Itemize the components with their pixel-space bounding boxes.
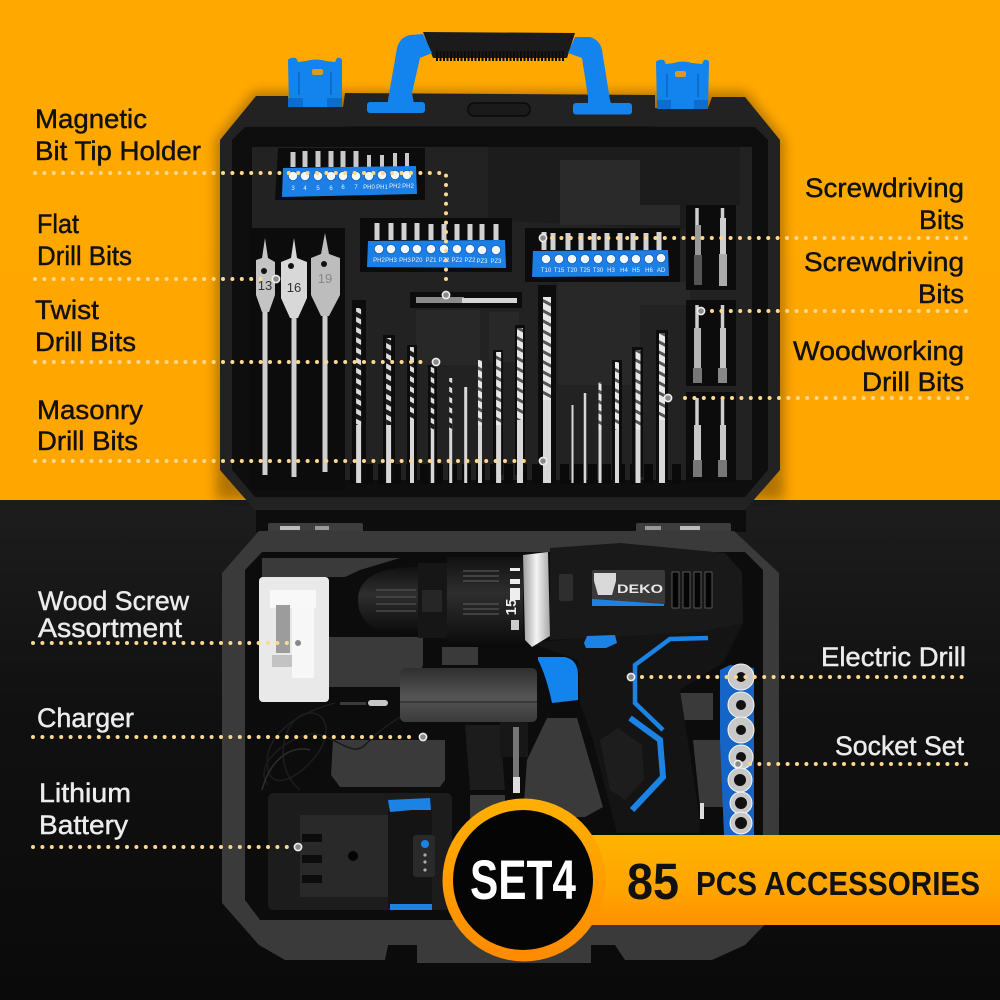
label: Screwdriving Bits 2 bbox=[804, 247, 964, 309]
label: Screwdriving Bits 1: Bits bbox=[919, 205, 964, 235]
label: Masonry Drill Bits: Masonry bbox=[37, 395, 144, 425]
label: Screwdriving Bits 2: Bits bbox=[918, 279, 964, 309]
bit holder strip: torx / hex bbox=[532, 232, 669, 277]
label: Magnetic Bit Tip Holder bbox=[35, 104, 201, 166]
bit holder strip: PH / PZ: PZ3 bbox=[476, 259, 488, 265]
top case: left blue clasp bbox=[288, 58, 342, 107]
flat drill bits: 16 bbox=[287, 280, 301, 295]
bit holder strip: PH / PZ: PZ0 bbox=[411, 258, 423, 264]
bit holder strip: PH / PZ: PZ2 bbox=[464, 258, 476, 264]
drill: motor body bbox=[550, 543, 743, 640]
label: Magnetic Bit Tip Holder: Bit Tip Holder bbox=[35, 136, 201, 166]
drill: grip panel bbox=[600, 728, 644, 800]
top case: right blue clasp bbox=[656, 60, 709, 109]
magnetic bit holder strip: 6 bbox=[341, 185, 345, 191]
label: Woodworking Drill Bits bbox=[793, 336, 964, 397]
label: Flat Drill Bits: Drill Bits bbox=[37, 241, 132, 271]
label: Magnetic Bit Tip Holder: Magnetic bbox=[35, 104, 147, 134]
drill: DEKO badge: DEKO bbox=[617, 582, 663, 596]
bit holder strip: torx / hex: H4 bbox=[620, 268, 628, 274]
label: Lithium Battery bbox=[39, 778, 131, 840]
wood screw assortment box bbox=[259, 577, 329, 702]
bit holder strip: PH / PZ: PZ2 bbox=[451, 258, 463, 264]
magnetic bit tip holder bbox=[416, 297, 517, 303]
handle: right blue arm bbox=[568, 37, 632, 114]
magnetic bit holder strip: 7 bbox=[354, 185, 358, 191]
bit holder strip: torx / hex: AD bbox=[657, 268, 666, 274]
label: Masonry Drill Bits bbox=[37, 395, 144, 456]
electric drill bbox=[358, 543, 743, 833]
label: Woodworking Drill Bits: Drill Bits bbox=[862, 367, 964, 397]
bit holder strip: torx / hex: H3 bbox=[607, 268, 615, 274]
label: Lithium Battery: Lithium bbox=[39, 778, 131, 808]
magnetic bit holder strip: PH0 bbox=[363, 185, 375, 191]
flat drill bits: 13 bbox=[258, 278, 272, 293]
drill: chuck bbox=[358, 567, 418, 635]
banner: SET4 badge: SET4 bbox=[470, 848, 576, 911]
bit holder strip: torx / hex: H5 bbox=[632, 268, 640, 274]
label: Electric Drill: Electric Drill bbox=[821, 642, 966, 672]
drill: DEKO badge bbox=[592, 570, 665, 606]
label: Screwdriving Bits 1 bbox=[805, 173, 964, 235]
bit holder strip: torx / hex: T10 bbox=[541, 268, 552, 274]
charger body and plug bbox=[400, 668, 537, 793]
callout lines: top section bbox=[35, 173, 968, 465]
label: Lithium Battery: Battery bbox=[39, 810, 129, 840]
top case: shell bbox=[220, 93, 780, 510]
socket set bbox=[720, 664, 754, 835]
banner: 85 PCS ACCESSORIES bbox=[627, 853, 980, 910]
flat drill bits bbox=[256, 233, 340, 477]
magnetic bit holder strip: 6 bbox=[329, 186, 333, 192]
bit holder strip: PH / PZ: PZ1 bbox=[425, 258, 437, 264]
bit holder strip: PH / PZ: PH3 bbox=[399, 258, 411, 264]
drill: vents bbox=[672, 572, 712, 608]
magnetic bit holder strip: 3 bbox=[291, 186, 295, 192]
screwdriving bits, right column bbox=[693, 208, 727, 477]
label: Twist Drill Bits: Drill Bits bbox=[35, 327, 136, 357]
bit holder strip: PH / PZ: PZ3 bbox=[490, 259, 502, 265]
bit holder strip: torx / hex: T15 bbox=[554, 268, 565, 274]
label: Socket Set: Socket Set bbox=[835, 731, 964, 761]
drill: ring and clutch: 15 bbox=[503, 599, 520, 615]
bit holder strip: torx / hex: T20 bbox=[567, 268, 578, 274]
bottom case: shell bbox=[222, 531, 779, 963]
handle: left blue arm bbox=[367, 34, 432, 113]
top case: soft shadow bbox=[216, 92, 784, 500]
bit holder strip: PH / PZ: PH3 bbox=[385, 258, 397, 264]
lithium battery bbox=[268, 793, 452, 910]
hinges bbox=[256, 510, 746, 534]
label: Masonry Drill Bits: Drill Bits bbox=[37, 426, 138, 456]
twist and masonry drill bits bbox=[359, 297, 662, 483]
drill: ring and clutch bbox=[418, 557, 523, 647]
label: Woodworking Drill Bits: Woodworking bbox=[793, 336, 964, 366]
bit holder strip: PH / PZ: PH2 bbox=[373, 258, 385, 264]
flat drill bits: 19 bbox=[318, 271, 332, 286]
callout lines: bottom section bbox=[33, 640, 970, 851]
banner: 85 PCS ACCESSORIES: 85 bbox=[627, 853, 679, 910]
label: Twist Drill Bits bbox=[35, 295, 136, 357]
magnetic bit holder strip: PH1 bbox=[376, 185, 388, 191]
label: Screwdriving Bits 1: Screwdriving bbox=[805, 173, 964, 203]
label: Screwdriving Bits 2: Screwdriving bbox=[804, 247, 964, 277]
charger cord bbox=[262, 700, 410, 790]
top case: molded insert bbox=[250, 147, 752, 490]
magnetic bit holder strip: 5 bbox=[316, 186, 320, 192]
banner: orange bar bbox=[585, 835, 1000, 925]
bit holder strip: torx / hex: T30 bbox=[593, 268, 604, 274]
banner: SET4 badge bbox=[442, 798, 606, 962]
bottom case: inner tray bbox=[245, 552, 763, 920]
background: orange top band bbox=[0, 0, 1000, 500]
magnetic bit holder strip: 4 bbox=[303, 186, 307, 192]
drill: trigger bbox=[538, 657, 578, 703]
magnetic bit holder strip bbox=[282, 151, 417, 197]
background: black bottom band bbox=[0, 500, 1000, 1000]
label: Flat Drill Bits: Flat bbox=[37, 209, 79, 239]
magnetic bit holder strip: PH2 bbox=[402, 184, 414, 190]
label: Charger: Charger bbox=[37, 703, 134, 733]
label: Twist Drill Bits: Twist bbox=[35, 295, 100, 325]
top case: inner tray bbox=[232, 127, 768, 497]
handle: grip bbox=[423, 32, 575, 58]
label: Wood Screw Assortment bbox=[38, 586, 189, 643]
drill: blue handle stripes bbox=[630, 638, 708, 810]
label: Wood Screw Assortment: Wood Screw bbox=[38, 586, 189, 616]
label: Flat Drill Bits bbox=[37, 209, 132, 271]
bit holder strip: torx / hex: H6 bbox=[645, 268, 653, 274]
drill: direction switch bbox=[584, 635, 617, 648]
bit holder strip: PH / PZ bbox=[367, 223, 506, 268]
bit holder strip: torx / hex: T25 bbox=[580, 268, 591, 274]
top case: handle bbox=[367, 32, 632, 114]
bit holder strip: PH / PZ: PZ2 bbox=[438, 258, 450, 264]
bottom case: foam insert shapes bbox=[262, 558, 723, 830]
drill: metal collar bbox=[523, 552, 550, 647]
magnetic bit holder strip: PH2 bbox=[389, 184, 401, 190]
drill: handle bbox=[530, 623, 743, 833]
label: Wood Screw Assortment: Assortment bbox=[38, 613, 183, 643]
